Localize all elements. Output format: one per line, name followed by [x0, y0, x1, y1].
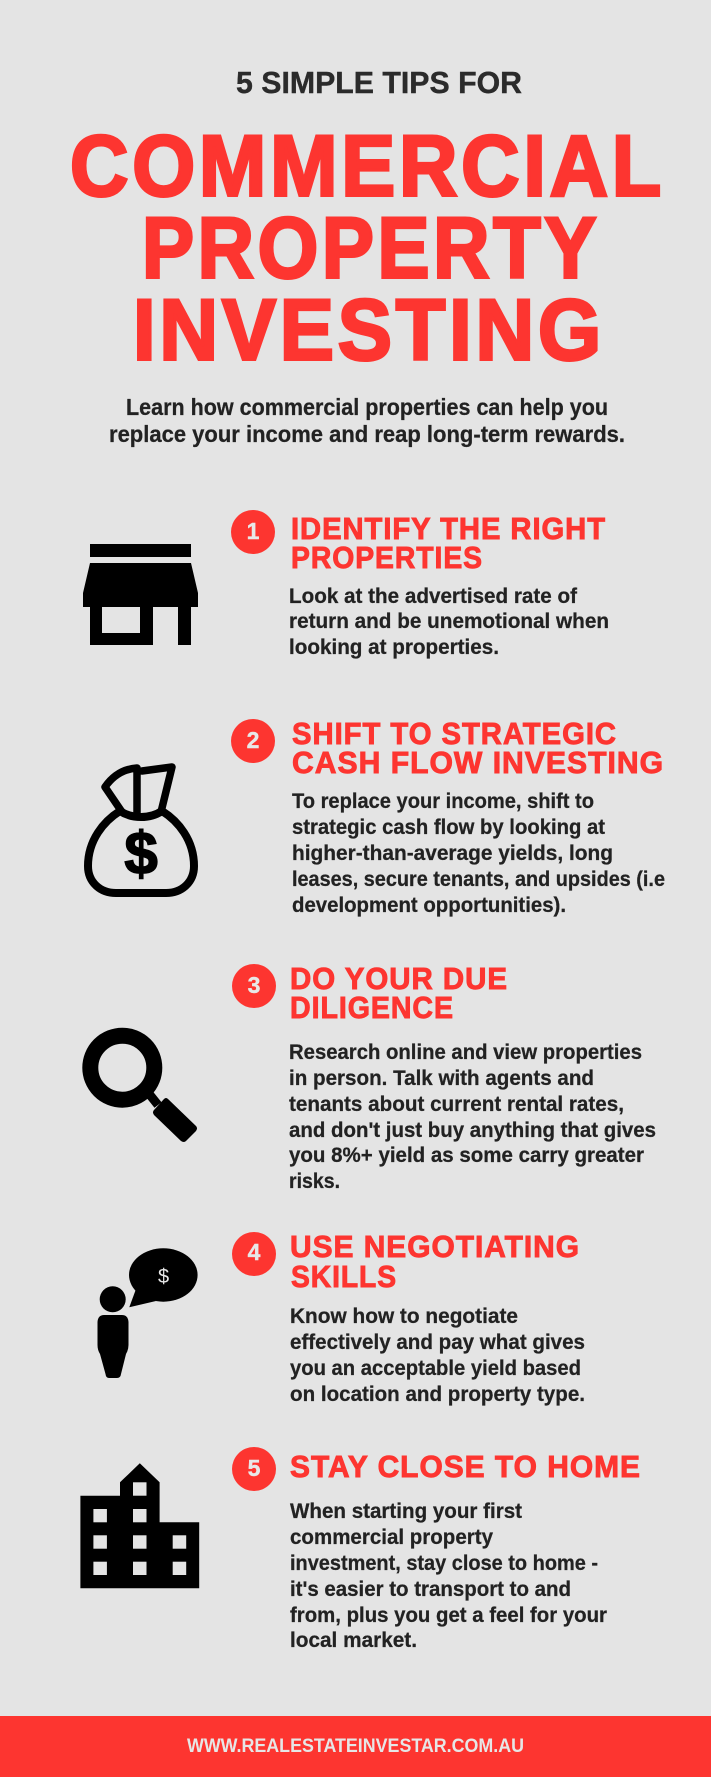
number badge 5 [232, 1447, 276, 1491]
body: tip 3 [289, 1040, 656, 1193]
body: tip 1: Look at the advertised rate of [289, 584, 578, 608]
panel: tip 1 [83, 510, 609, 659]
body: tip 5: it's easier to transport to and [290, 1577, 571, 1601]
body: tip 5: from, plus you get a feel for your [290, 1603, 608, 1627]
icon: money bag: $ [124, 820, 158, 887]
panel: tip 4 [98, 1229, 585, 1406]
heading: tip 3: DILIGENCE [290, 990, 454, 1025]
heading: tip 5: STAY CLOSE TO HOME [290, 1449, 641, 1484]
heading: tip 2: CASH FLOW INVESTING [292, 745, 664, 780]
icon: storefront [83, 544, 198, 645]
heading: tip 3: DO YOUR DUE [290, 961, 508, 996]
body: tip 4: you an acceptable yield based [290, 1356, 581, 1380]
body: tip 3: risks. [289, 1169, 340, 1193]
icon: money bag [88, 767, 194, 893]
heading: tip 2 [292, 716, 664, 780]
number badge 4 [232, 1232, 276, 1276]
number badge 5: 5 [248, 1455, 261, 1481]
body: tip 3: tenants about current rental rates, [289, 1092, 624, 1116]
heading: tip 3 [290, 961, 508, 1025]
main title: COMMERCIAL [70, 118, 665, 214]
body: tip 2: higher-than-average yields, long [292, 841, 613, 865]
body: tip 5: investment, stay close to home - [290, 1551, 598, 1575]
heading: tip 4: SKILLS [291, 1259, 397, 1294]
body: tip 5: local market. [290, 1628, 417, 1652]
body: tip 3: Research online and view properties [289, 1040, 642, 1064]
body: tip 2: development opportunities). [292, 893, 566, 917]
panel: tip 2 [88, 716, 665, 917]
body: tip 3: you 8%+ yield as some carry greater [289, 1143, 645, 1167]
heading: tip 4 [290, 1229, 580, 1294]
body: tip 3: in person. Talk with agents and [289, 1066, 594, 1090]
icon: person with dollar speech bubble [98, 1248, 198, 1378]
heading: tip 2: SHIFT TO STRATEGIC [292, 716, 617, 751]
intro text [109, 394, 625, 447]
icon: magnifying glass [90, 1036, 197, 1142]
footer bar [0, 1716, 711, 1777]
body: tip 3: and don't just buy anything that gives [289, 1118, 656, 1142]
body: tip 2 [292, 789, 665, 917]
number badge 2 [231, 719, 275, 763]
number badge 4: 4 [248, 1239, 261, 1265]
body: tip 4: effectively and pay what gives [290, 1330, 585, 1354]
number badge 1 [231, 510, 275, 554]
number badge 1: 1 [247, 518, 260, 544]
main title [70, 118, 665, 378]
body: tip 5 [290, 1499, 608, 1652]
body: tip 2: strategic cash flow by looking at [292, 815, 605, 839]
main title: INVESTING [133, 282, 605, 378]
body: tip 4: Know how to negotiate [290, 1304, 518, 1328]
body: tip 1: return and be unemotional when [289, 609, 609, 633]
header kicker: 5 SIMPLE TIPS FOR [236, 65, 522, 100]
body: tip 5: When starting your first [290, 1499, 522, 1523]
body: tip 1 [289, 584, 609, 659]
body: tip 4: on location and property type. [290, 1382, 585, 1406]
heading: tip 1: IDENTIFY THE RIGHT [291, 511, 606, 546]
intro text: Learn how commercial properties can help you [126, 394, 608, 420]
main title: PROPERTY [142, 200, 600, 296]
panel: tip 5 [80, 1447, 641, 1652]
panel: tip 3 [90, 961, 656, 1193]
icon: office building [80, 1463, 199, 1588]
body: tip 2: To replace your income, shift to [292, 789, 594, 813]
body: tip 1: looking at properties. [289, 635, 499, 659]
heading: tip 1 [291, 511, 606, 575]
body: tip 4 [290, 1304, 585, 1406]
number badge 3 [232, 964, 276, 1008]
footer bar: WWW.REALESTATEINVESTAR.COM.AU [187, 1735, 524, 1757]
heading: tip 1: PROPERTIES [291, 540, 483, 575]
body: tip 5: commercial property [290, 1525, 493, 1549]
body: tip 2: leases, secure tenants, and upsides (i.e [292, 867, 665, 891]
number badge 2: 2 [247, 727, 259, 753]
icon: person with dollar speech bubble: $ [158, 1266, 169, 1288]
number badge 3: 3 [248, 972, 260, 998]
intro text: replace your income and reap long-term rewards. [109, 421, 625, 447]
heading: tip 4: USE NEGOTIATING [290, 1229, 580, 1264]
